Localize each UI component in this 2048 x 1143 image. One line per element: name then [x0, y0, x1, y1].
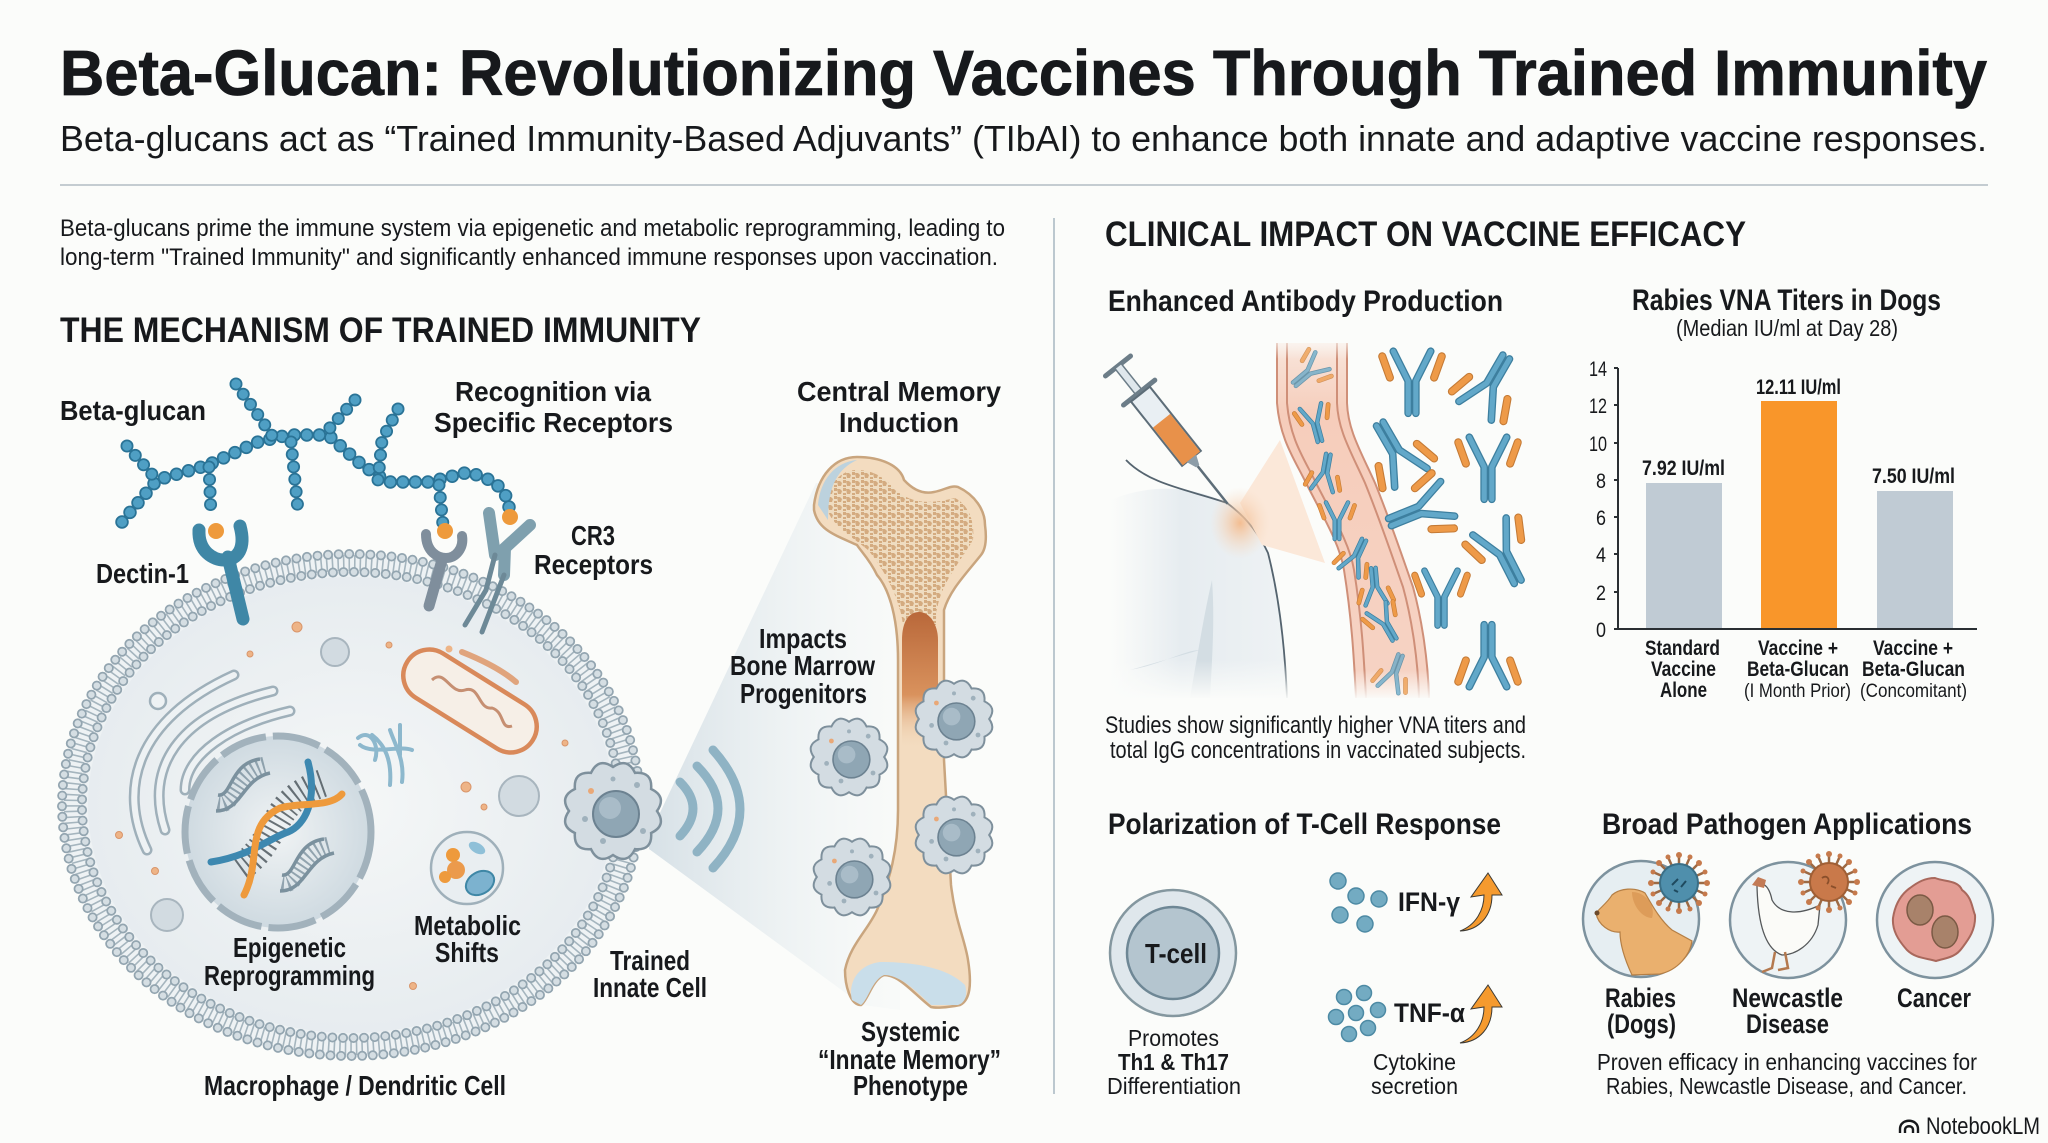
organelle: golgi: [358, 725, 412, 785]
category labels: Standard: [1645, 637, 1720, 660]
TNF-alpha label: TNF-α: [1394, 998, 1465, 1028]
bone marrow progenitor cells: [811, 681, 992, 915]
labels: mechanism: Shifts: [435, 937, 499, 968]
axis tick labels: 6: [1596, 507, 1606, 530]
cytokine caption: [1371, 1049, 1458, 1099]
axis tick labels: 4: [1596, 544, 1606, 567]
organelle: mitochondrion: [393, 640, 547, 762]
labels: mechanism: Innate Cell: [593, 972, 707, 1003]
labels: mechanism: Trained: [610, 945, 690, 976]
panel: pathogens: [1583, 851, 1993, 1099]
category labels: [1645, 637, 1967, 702]
pathogen labels: Cancer: [1897, 983, 1971, 1013]
heading: T-cell: Polarization of T-Cell Response: [1108, 808, 1501, 841]
pathogen labels: Newcastle: [1732, 983, 1843, 1013]
cartilage: [851, 962, 966, 1005]
pathogen labels: Rabies: [1605, 983, 1676, 1013]
labels: mechanism: Induction: [839, 407, 959, 438]
labels: mechanism: Receptors: [534, 549, 653, 580]
signal waves: [680, 750, 740, 868]
IFN-gamma label: IFN-γ: [1398, 887, 1460, 917]
labels: mechanism: Progenitors: [740, 678, 867, 709]
labels: mechanism: Reprogramming: [204, 960, 375, 991]
T-cell caption: Promotes: [1128, 1025, 1219, 1051]
pathogen caption: Proven efficacy in enhancing vaccines for: [1597, 1049, 1977, 1075]
receptor: Dectin-1: [199, 523, 243, 619]
intro text: Beta-glucans prime the immune system via epigenetic and metabolic reprogramming, leading to: [60, 215, 1005, 242]
bars: [1646, 401, 1953, 629]
trained innate cell: [565, 763, 661, 859]
labels: mechanism: Systemic: [861, 1016, 960, 1047]
labels: mechanism: Beta-glucan: [60, 395, 206, 426]
subtitle: Beta-glucans act as “Trained Immunity-Based Adjuvants” (TIbAI) to enhance both innate and adaptive vaccine responses.: [60, 118, 1987, 159]
cytokine caption: Cytokine: [1373, 1049, 1456, 1075]
value labels: 7.92 IU/ml: [1642, 457, 1725, 480]
icon: rabies dog: [1583, 852, 1710, 977]
cone to bone: [649, 483, 900, 1010]
panel: T-cell response: [1107, 873, 1502, 1099]
category labels: Alone: [1660, 679, 1707, 702]
pathogen labels: (Dogs): [1607, 1009, 1676, 1039]
labels: mechanism: Epigenetic: [233, 932, 346, 963]
intro text: long-term "Trained Immunity" and significantly enhanced immune responses upon vaccination.: [60, 244, 998, 271]
syringe: [1102, 354, 1243, 516]
panel: cell mechanism illustration: [61, 384, 992, 1057]
arrow: IFN-gamma up: [1460, 873, 1502, 931]
axis tick labels: 2: [1596, 582, 1606, 605]
T-cell caption: Th1 & Th17: [1118, 1049, 1229, 1075]
labels: mechanism: [60, 376, 1001, 1101]
heading: pathogen: Broad Pathogen Applications: [1602, 808, 1972, 841]
labels: mechanism: Metabolic: [414, 910, 521, 941]
axis tick labels: 12: [1589, 395, 1607, 418]
pathogen labels: [1605, 983, 1971, 1039]
organelle: vesicles: [151, 638, 539, 931]
axis tick labels: 8: [1596, 470, 1606, 493]
shoulder: [1105, 460, 1295, 700]
cell body and membrane: [61, 553, 641, 1057]
pathogen caption: [1597, 1049, 1977, 1099]
organelle: nucleus: [185, 736, 371, 928]
organelle: metabolic vesicle: [431, 832, 503, 904]
IFN-gamma cytokine dots: [1330, 873, 1387, 932]
labels: mechanism: Recognition via: [455, 376, 651, 407]
category labels: (I Month Prior): [1744, 681, 1851, 702]
organelle: endoplasmic reticulum: [134, 675, 290, 850]
value labels: [1642, 376, 1955, 488]
heading: mechanism: THE MECHANISM OF TRAINED IMMUNITY: [60, 311, 701, 350]
bar chart: [1589, 358, 1977, 702]
labels: mechanism: Impacts: [759, 623, 847, 654]
chart heading: (Median IU/ml at Day 28): [1676, 315, 1898, 341]
beta-glucan chain: [122, 384, 509, 525]
icon: cancer cell: [1877, 862, 1993, 978]
caption: antibody: total IgG concentrations in vaccinated subjects.: [1110, 737, 1526, 764]
labels: mechanism: “Innate Memory”: [818, 1044, 1001, 1075]
category labels: Beta-Glucan: [1747, 658, 1849, 681]
receptor: CR3: [465, 509, 530, 632]
category labels: Vaccine: [1651, 658, 1716, 681]
TNF-alpha cytokine dots: [1328, 986, 1386, 1042]
pathogen caption: Rabies, Newcastle Disease, and Cancer.: [1606, 1073, 1967, 1099]
caption: antibody: Studies show significantly higher VNA titers and: [1105, 712, 1526, 739]
bone: [814, 457, 986, 1008]
axes: [1614, 368, 1977, 630]
chart heading: Rabies VNA Titers in Dogs: [1632, 284, 1941, 317]
free antibodies: [1354, 342, 1544, 687]
dna helix: [211, 762, 342, 895]
marrow: [902, 612, 938, 750]
orange granules: [116, 622, 568, 990]
value labels: 7.50 IU/ml: [1872, 465, 1955, 488]
axis tick labels: 14: [1589, 358, 1607, 381]
axis tick labels: [1589, 358, 1607, 642]
axis tick labels: 10: [1589, 433, 1607, 456]
pathogen labels: Disease: [1746, 1009, 1829, 1039]
category labels: Vaccine +: [1873, 637, 1953, 660]
category labels: (Concomitant): [1860, 681, 1967, 702]
title: Beta-Glucan: Revolutionizing Vaccines Through Trained Immunity: [60, 37, 1987, 109]
chart heading: [1632, 284, 1941, 341]
T-cell: [1110, 890, 1236, 1016]
labels: mechanism: Dectin-1: [96, 558, 189, 589]
value labels: 12.11 IU/ml: [1756, 376, 1841, 399]
T-cell caption: [1107, 1025, 1241, 1099]
labels: mechanism: Phenotype: [853, 1070, 968, 1101]
labels: mechanism: Central Memory: [797, 376, 1001, 407]
labels: mechanism: Bone Marrow: [730, 650, 875, 681]
labels: mechanism: Specific Receptors: [434, 407, 673, 438]
icon: chicken with virus: [1730, 851, 1860, 978]
spongy bone: [826, 470, 973, 625]
intro text: [60, 215, 1005, 271]
axis tick labels: 0: [1596, 619, 1606, 642]
category labels: Beta-Glucan: [1862, 658, 1965, 681]
receptor: grey: [426, 523, 462, 606]
T-cell: T-cell: [1145, 938, 1207, 969]
antibodies in vessel: [1283, 347, 1417, 695]
labels: mechanism: CR3: [571, 520, 615, 551]
labels: mechanism: Macrophage / Dendritic Cell: [204, 1070, 506, 1101]
blood vessel: [1269, 334, 1435, 700]
caption: antibody: [1105, 712, 1526, 764]
arrow: TNF-alpha up: [1460, 985, 1502, 1043]
heading: clinical impact: CLINICAL IMPACT ON VACCINE EFFICACY: [1105, 215, 1746, 254]
category labels: Vaccine +: [1758, 637, 1838, 660]
magnification fan: [1240, 440, 1325, 563]
illustration: vaccine injection and antibodies: [1102, 334, 1544, 700]
heading: antibody production: Enhanced Antibody Production: [1108, 285, 1503, 318]
cytokine caption: secretion: [1371, 1073, 1458, 1099]
T-cell caption: Differentiation: [1107, 1073, 1241, 1099]
